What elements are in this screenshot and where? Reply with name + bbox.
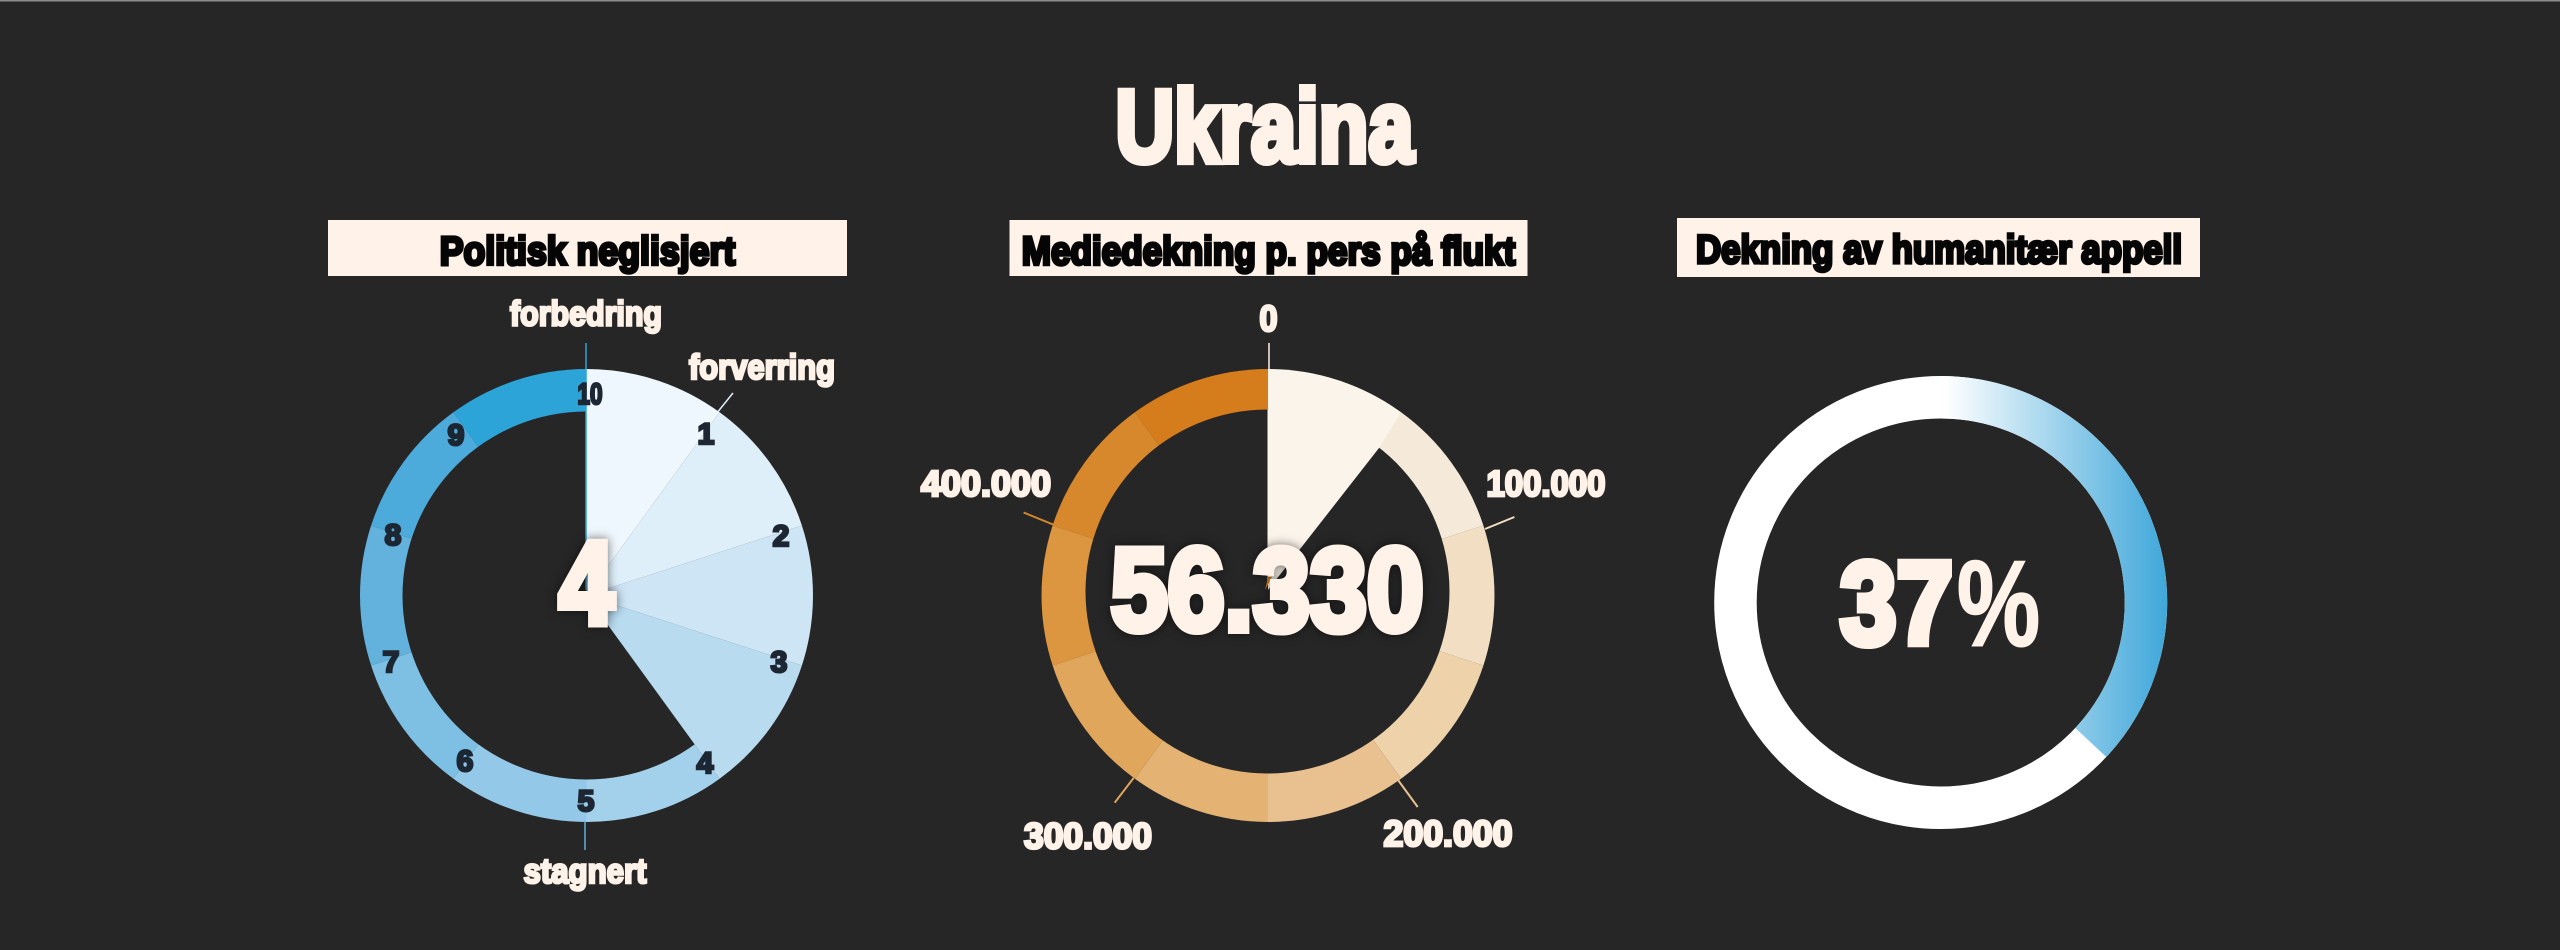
value: 56.330: 56.330 bbox=[1111, 524, 1424, 655]
value: 37%: 37 bbox=[1840, 538, 1953, 668]
scale numbers: 1 bbox=[698, 418, 714, 451]
label: forbedring: forbedring bbox=[510, 294, 662, 334]
scale numbers: 2 bbox=[773, 520, 789, 553]
heading: mediedekning: Mediedekning p. pers på flukt bbox=[1022, 229, 1515, 273]
label: forverring: forverring bbox=[689, 348, 835, 387]
label: 400.000: 400.000 bbox=[921, 463, 1051, 504]
panel: dekning av humanitaer appell bbox=[1677, 218, 2200, 808]
value: 37%: % bbox=[1957, 536, 2040, 672]
scale numbers: 10 bbox=[578, 378, 602, 411]
scale numbers: 3 bbox=[771, 646, 787, 679]
value: 37% bbox=[1840, 536, 2040, 672]
heading: dekning av humanitaer appell: Dekning av humanitær appell bbox=[1696, 228, 2182, 272]
label: 200.000: 200.000 bbox=[1384, 813, 1512, 854]
scale numbers bbox=[383, 378, 789, 818]
panel: politisk neglisjert bbox=[328, 220, 847, 891]
value: 4: 4 bbox=[559, 518, 614, 649]
label: 0: 0 bbox=[1260, 298, 1278, 339]
scale numbers: 7 bbox=[383, 646, 399, 679]
gauge: media coverage dial bbox=[1024, 343, 1514, 822]
scale numbers: 8 bbox=[385, 519, 401, 552]
label: 100.000: 100.000 bbox=[1486, 463, 1606, 504]
heading: politisk neglisjert bbox=[328, 220, 847, 276]
scale numbers: 6 bbox=[457, 745, 473, 778]
scale numbers: 4 bbox=[697, 747, 714, 780]
heading: politisk neglisjert: Politisk neglisjert bbox=[440, 229, 735, 273]
scale numbers: 5 bbox=[578, 785, 594, 818]
heading: dekning av humanitaer appell bbox=[1677, 218, 2200, 277]
gauge: appeal coverage ring bbox=[1735, 376, 2167, 808]
panel: mediedekning bbox=[921, 220, 1606, 856]
label: stagnert: stagnert bbox=[524, 852, 647, 891]
scale numbers: 9 bbox=[448, 419, 464, 452]
gauge: political neglect dial bbox=[360, 343, 813, 850]
title: Ukraina bbox=[1116, 70, 1415, 184]
label: 300.000: 300.000 bbox=[1024, 816, 1152, 856]
